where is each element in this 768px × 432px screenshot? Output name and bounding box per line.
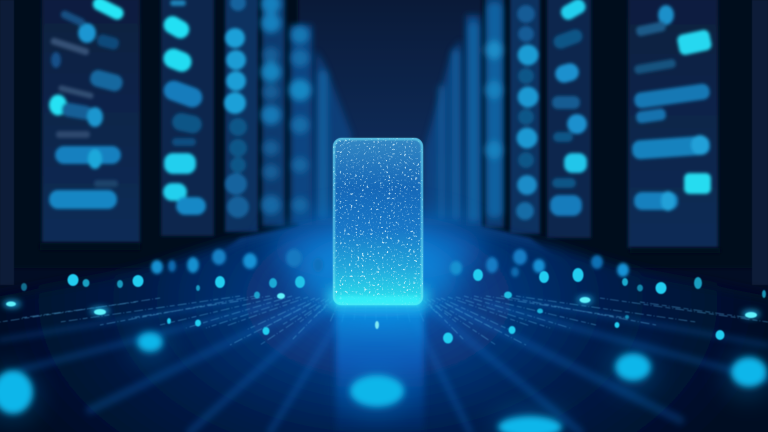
rack two indicator lights [160, 0, 206, 215]
background wall and ceiling [0, 0, 768, 262]
floor sparkle nodes [3, 293, 760, 318]
block base glow [298, 233, 458, 317]
glowing glass block [328, 138, 428, 308]
floor [0, 228, 768, 432]
floor lights middle row [21, 268, 766, 344]
left server racks [0, 0, 352, 285]
right rack four and five indicator lights [438, 2, 503, 222]
floor lights far row [151, 249, 629, 277]
rack five indicator lights [289, 26, 328, 220]
right rack one indicator lights [631, 5, 713, 211]
rack four indicator lights [261, 0, 281, 215]
dark band under racks [40, 243, 720, 253]
fine data lines radiating on floor [0, 296, 768, 345]
rack one indicator lights [49, 0, 126, 209]
blurred light beams on floor [0, 300, 768, 432]
right server racks [424, 0, 768, 285]
right rack two indicator lights [550, 0, 588, 216]
right rack three indicator lights [516, 5, 538, 220]
large near floor lights [0, 329, 768, 432]
block light reflection [336, 304, 424, 432]
corridor vanishing glow [273, 214, 483, 282]
rack three indicator lights [224, 0, 249, 218]
